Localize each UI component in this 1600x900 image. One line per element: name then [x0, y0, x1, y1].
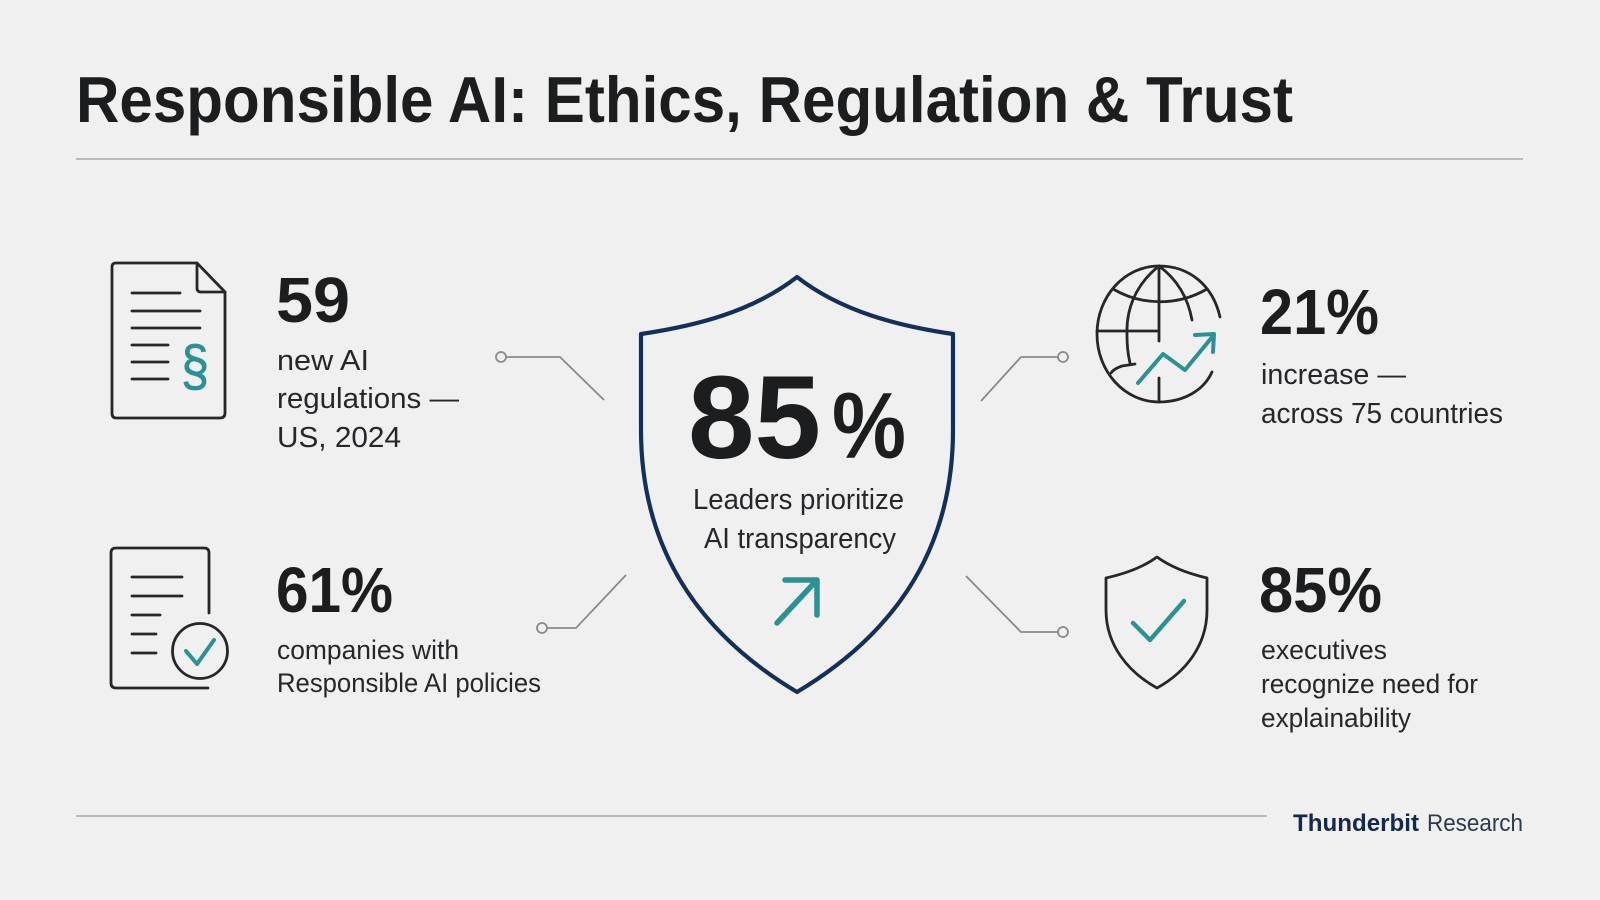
footer: source credit	[1293, 810, 1523, 837]
label: companies with Responsible AI policies: companies with	[277, 635, 459, 665]
label: new AI regulations, US 2024: new AI	[277, 345, 369, 377]
footer: source credit: Research	[1427, 810, 1523, 837]
icon: globe with rising trend	[1097, 266, 1220, 402]
panel: 21% increase across 75 countries	[1097, 266, 1503, 430]
connector: top left	[496, 352, 604, 400]
label: leaders prioritize AI transparency	[693, 484, 904, 555]
label: companies with Responsible AI policies: Responsible AI policies	[277, 668, 541, 698]
stat: 85%: 85%	[1259, 554, 1382, 626]
label: executives recognize need for explainability	[1261, 635, 1478, 733]
stat: 59: 59	[276, 264, 350, 336]
shield outline	[641, 277, 953, 692]
icon: legal document with section sign: §	[181, 334, 209, 398]
connector: bottom left	[537, 575, 626, 633]
icon: document with check badge	[111, 548, 228, 688]
label: leaders prioritize AI transparency: AI transparency	[704, 523, 896, 555]
title: Responsible AI: Ethics, Regulation & Trust	[76, 63, 1293, 136]
stat: 85 percent: %	[832, 373, 906, 478]
label: new AI regulations, US 2024	[277, 345, 459, 454]
label: executives recognize need for explainability: executives	[1261, 635, 1387, 665]
label: leaders prioritize AI transparency: Leaders prioritize	[693, 484, 904, 516]
label: increase across 75 countries: increase —	[1261, 359, 1406, 391]
connector: top right	[981, 352, 1068, 401]
stat: 21%: 21%	[1260, 276, 1379, 348]
icon: shield with check	[1106, 557, 1207, 688]
panel: 61% companies with policies	[111, 548, 541, 698]
stat: 85 percent: 85	[688, 352, 821, 484]
panel: 59 new AI regulations	[112, 263, 459, 454]
panel: 85% executives need explainability	[1106, 554, 1478, 733]
label: executives recognize need for explainability: recognize need for	[1261, 669, 1478, 699]
connector: bottom right	[966, 576, 1068, 637]
label: increase across 75 countries: across 75 countries	[1261, 398, 1503, 430]
stat: 61%: 61%	[276, 554, 393, 626]
label: executives recognize need for explainability: explainability	[1261, 703, 1412, 733]
label: new AI regulations, US 2024: regulations —	[277, 383, 459, 415]
label: new AI regulations, US 2024: US, 2024	[277, 422, 401, 454]
footer: source credit: Thunderbit	[1293, 810, 1419, 837]
panel: central shield 85%	[641, 277, 953, 692]
icon: up-right arrow	[777, 580, 817, 623]
label: increase across 75 countries	[1261, 359, 1503, 430]
icon: legal document with section sign	[112, 263, 225, 418]
stat: 85 percent	[688, 352, 906, 484]
label: companies with Responsible AI policies	[277, 635, 541, 698]
